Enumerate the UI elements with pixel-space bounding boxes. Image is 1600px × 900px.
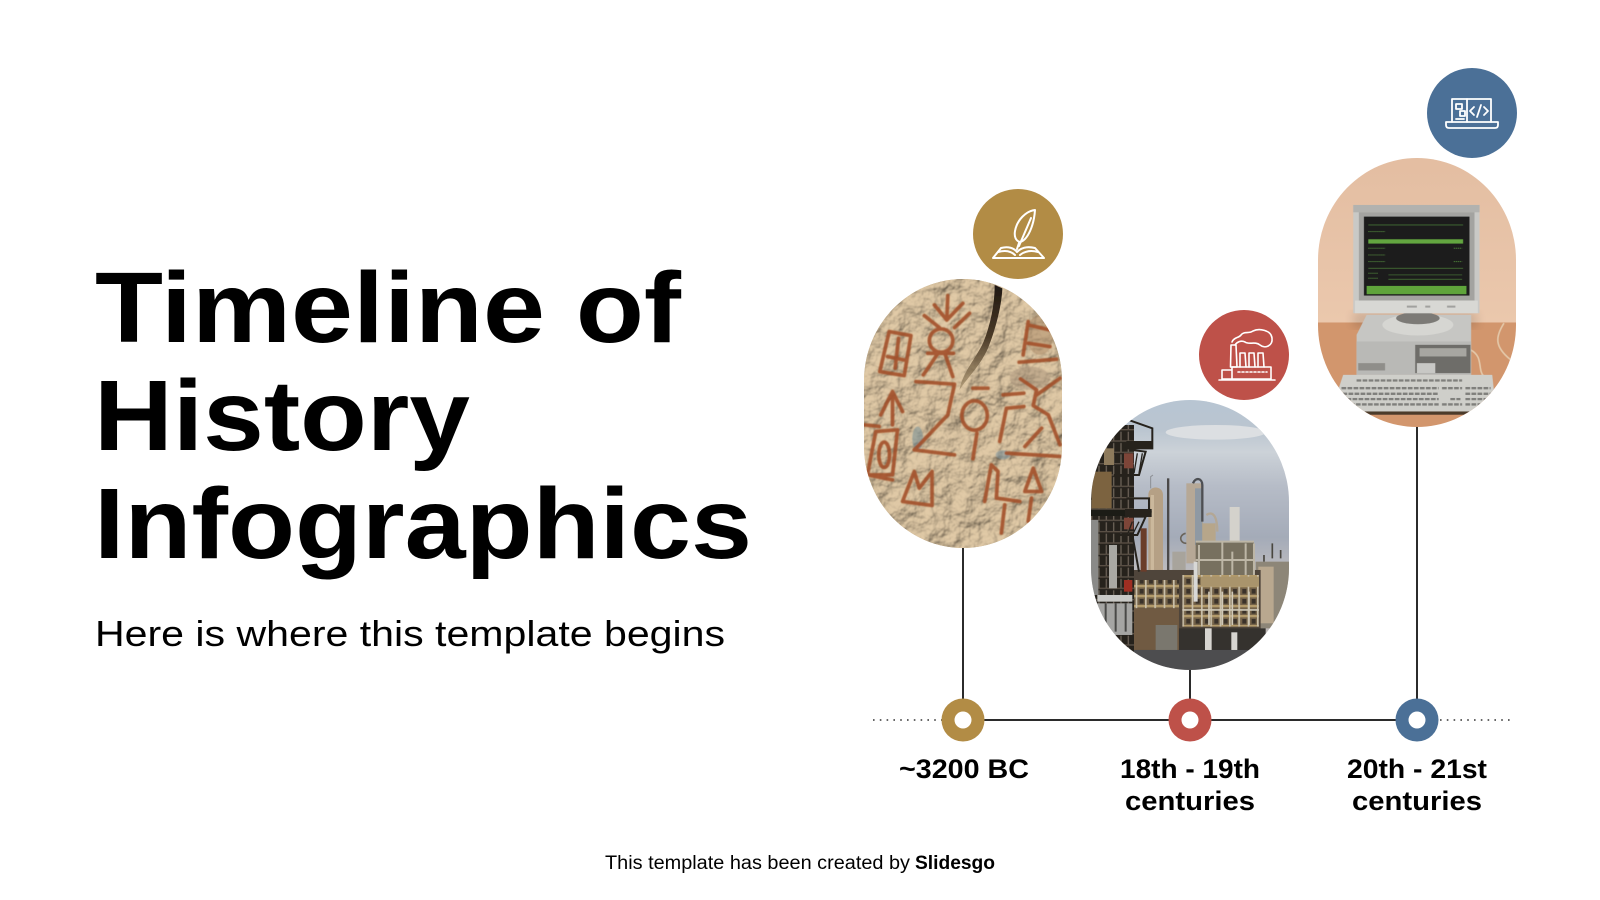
date label 1: ~3200 BC xyxy=(899,754,1029,784)
keyboard xyxy=(1338,375,1496,411)
stand xyxy=(1382,316,1454,336)
date label 2: centuries xyxy=(1125,786,1255,816)
title: History xyxy=(94,360,470,472)
date label 3: centuries xyxy=(1352,786,1482,816)
marker 1 xyxy=(942,698,984,742)
photo: refinery xyxy=(1091,400,1289,670)
title xyxy=(94,252,752,580)
credit footer: Slidesgo xyxy=(915,853,995,874)
date label 3 xyxy=(1347,754,1487,816)
base unit xyxy=(1357,315,1471,375)
connector 1 xyxy=(962,546,964,700)
left steel structure xyxy=(1089,425,1134,665)
stair platforms xyxy=(1114,418,1152,572)
date label 2 xyxy=(1120,754,1260,816)
title: Infographics xyxy=(94,468,752,580)
icon: quill and open book xyxy=(973,189,1063,279)
timeline axis xyxy=(873,719,1510,721)
columns xyxy=(1148,487,1163,572)
plant body xyxy=(1134,570,1261,628)
title: Timeline of xyxy=(95,252,682,364)
connector 2 xyxy=(1189,668,1191,700)
panel: industrial era xyxy=(1085,310,1300,816)
icon: factory xyxy=(1199,310,1289,400)
photo: rock carvings xyxy=(858,275,1068,555)
photo: retro computer xyxy=(1310,150,1531,436)
panel: digital era xyxy=(1310,68,1531,816)
main axis line xyxy=(963,719,1417,721)
date label 2: 18th - 19th xyxy=(1120,754,1260,784)
marker 3 xyxy=(1396,698,1438,742)
panel: writing era xyxy=(858,189,1068,784)
marker 2 xyxy=(1168,698,1212,742)
icon: laptop with code xyxy=(1427,68,1517,158)
monitor xyxy=(1353,205,1479,313)
dotted lead-out right xyxy=(1440,719,1510,721)
connector 3 xyxy=(1416,425,1418,700)
credit footer: This template has been created by xyxy=(605,853,911,874)
subtitle: Here is where this template begins xyxy=(95,613,725,654)
dotted lead-in left xyxy=(873,719,942,721)
date label 3: 20th - 21st xyxy=(1347,754,1487,784)
far right units xyxy=(1256,562,1296,628)
